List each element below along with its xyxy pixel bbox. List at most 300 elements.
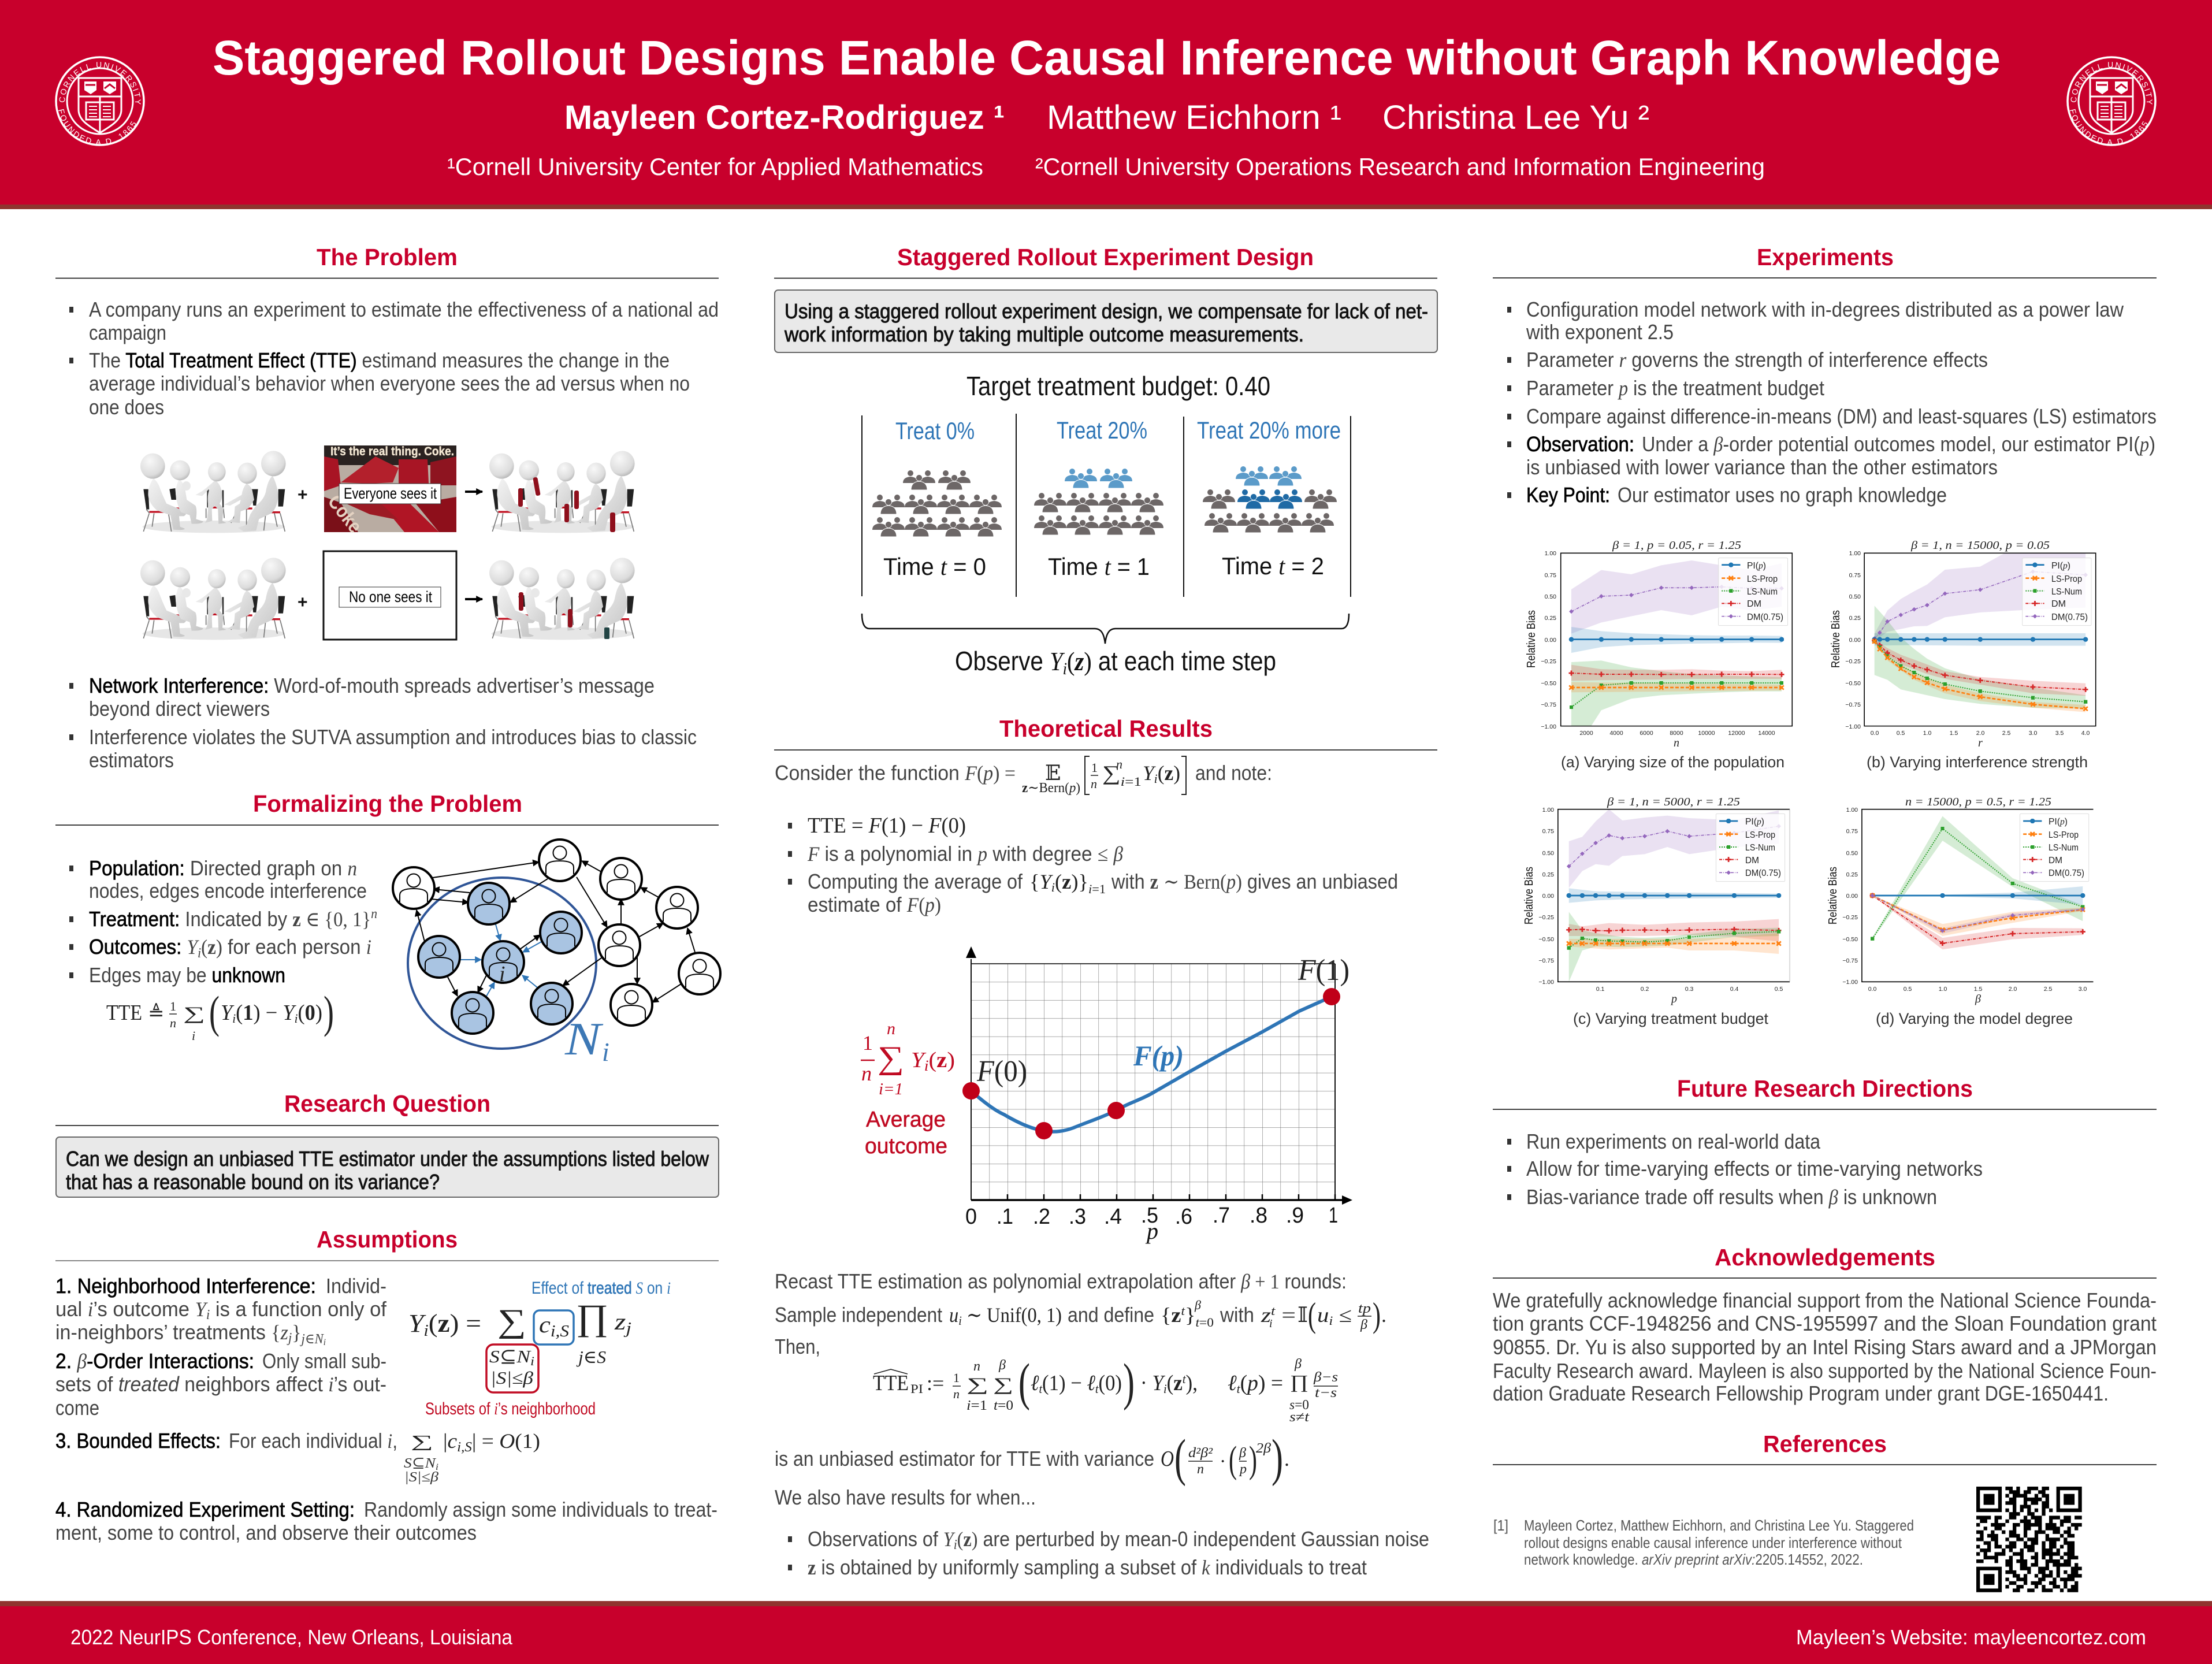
- bullets: experiment setup: Our estimator uses no graph knowledge: [1618, 483, 1947, 507]
- text: funding statement: tion grants CCF-1948256 and CNS-1955997 and the Sloan Foundation grant: [1493, 1312, 2157, 1335]
- formula: TTE definition: n: [170, 1016, 176, 1030]
- axis labels: −0.75: [1845, 701, 1861, 708]
- formula: PI estimator: t−s: [1315, 1386, 1337, 1401]
- stage: time 0: [872, 417, 1002, 581]
- text: variance bound: ·: [1220, 1451, 1226, 1472]
- text: variance bound: β: [1239, 1446, 1246, 1461]
- bullets: properties of F: [788, 814, 1398, 916]
- y-axis label: outcome: [865, 1134, 947, 1158]
- axis labels: −0.75: [1538, 957, 1554, 964]
- text: citation: [1493, 1517, 1914, 1568]
- formula: potential outcomes model: ∑: [497, 1303, 526, 1339]
- text: assumption 3: O(1): [499, 1429, 539, 1453]
- text: polynomial extrapolation: ≤: [1333, 1303, 1352, 1327]
- axis labels: [1842, 807, 1858, 986]
- formula: TTE definition: TTE: [106, 1001, 142, 1025]
- chart (b): varying interference strength: [1830, 539, 2096, 771]
- text: assumption 1: i: [324, 1338, 326, 1347]
- formula: TTE definition: ): [324, 987, 334, 1037]
- heading: Formalizing the Problem: Formalizing the Problem: [253, 790, 522, 817]
- axis labels: 0.75: [1545, 572, 1556, 579]
- formula: F(p) definition: i: [1121, 774, 1125, 789]
- chart (d): varying model degree: β: [1975, 993, 1981, 1005]
- panel: Formalizing the Problem: [55, 790, 720, 1067]
- bullets: extensions: [788, 1527, 1429, 1579]
- callout: coefficient box: [534, 1310, 574, 1344]
- formula: potential outcomes model: (: [429, 1309, 438, 1338]
- image: Coke ad: It’s the real thing. Coke.: [330, 445, 454, 458]
- bullets: properties of F: z)}: [1062, 870, 1088, 893]
- text: polynomial extrapolation: t: [1271, 1303, 1276, 1318]
- text: variance bound: p: [1239, 1462, 1247, 1477]
- axis labels: [1845, 550, 1861, 730]
- formula: PI estimator: t: [1039, 1381, 1043, 1396]
- x-axis labels: .2: [1033, 1205, 1050, 1229]
- formula: TTE definition: i: [192, 1028, 195, 1043]
- legend labels: LS-Num: [1745, 843, 1775, 853]
- text: citation: Mayleen Cortez, Matthew Eichhorn, and Christina Lee Yu. Staggered: [1524, 1517, 1914, 1534]
- text: assumption 1: j∈N: [300, 1332, 325, 1347]
- y-axis label: n: [861, 1062, 872, 1085]
- chart (a): varying population size: 2000: [1579, 730, 1593, 737]
- formula: PI estimator: 1: [953, 1370, 960, 1385]
- formula: TTE definition: 1) − Y: [243, 1001, 295, 1025]
- icon: Cornell seal right: FOUNDED A.D. 1865: [2070, 109, 2148, 144]
- text: polynomial extrapolation: (: [1308, 1296, 1316, 1334]
- chart (c): varying treatment budget: β = 1, n = 5000, r = 1.25: [1607, 796, 1740, 808]
- formula: F(p) definition: n: [1116, 757, 1122, 771]
- bullets: extensions: z) are perturbed by mean-0 independent Gaussian noise: [963, 1527, 1482, 1551]
- text: polynomial extrapolation: =0: [1199, 1315, 1214, 1329]
- bullets: formal definitions: Edges may be unknown: [89, 963, 285, 987]
- bullets: problem statement: The Total Treatment Effect (TTE) estimand measures the change in the: [89, 348, 670, 372]
- x-axis labels: .4: [1104, 1205, 1122, 1229]
- legend labels: PI(p): [2051, 561, 2070, 571]
- formula: PI estimator: t: [1095, 1381, 1099, 1396]
- panel: Experiments: [1493, 244, 2157, 1027]
- chart (b): varying interference strength: (b) Varying interference strength: [1867, 753, 2088, 771]
- text: variance bound: [775, 1429, 1289, 1509]
- formula: F(p) definition: Y: [1143, 762, 1157, 785]
- text: variance bound: ): [1272, 1429, 1283, 1487]
- x-axis labels: 1: [1329, 1204, 1338, 1228]
- formula: PI estimator: PI: [910, 1381, 923, 1396]
- formula: TTE definition: Y: [221, 1001, 235, 1025]
- formula: potential outcomes model: j∈S: [576, 1347, 606, 1367]
- text: assumption 1: ual i’s outcome Y: [55, 1297, 207, 1321]
- text: polynomial extrapolation: i: [958, 1313, 962, 1328]
- panel: Future Research Directions: [1493, 1075, 2157, 1209]
- bullets: properties of F: i: [1088, 882, 1092, 896]
- bullets: properties of F: =1: [1092, 882, 1106, 896]
- figure: everyone sees the ad: [140, 445, 635, 537]
- bullets: extensions: i: [954, 1537, 957, 1552]
- chart (a): varying population size: Relative Bias: [1525, 610, 1538, 668]
- heading: Theoretical Results: Theoretical Results: [999, 715, 1213, 742]
- formula: PI estimator: ∑: [993, 1374, 1013, 1394]
- bullets: formal definitions: Outcomes: Y: [89, 935, 199, 959]
- formula: F(p) definition: z): [1164, 762, 1180, 785]
- formula: PI estimator: · Y: [1140, 1371, 1165, 1395]
- text: assumption 1: in-neighbors’ treatments {z: [55, 1320, 289, 1344]
- text: assumption 4: Randomly assign some individuals to treat-: [364, 1498, 717, 1521]
- affiliations: ¹Cornell University Center for Applied Mathematics: [447, 153, 983, 180]
- bullets: properties of F: estimate of F(p): [808, 893, 941, 916]
- diagram: interference network: [393, 840, 720, 1067]
- chart (b): varying interference strength: β = 1, n = 15000, p = 0.05: [1910, 539, 2050, 552]
- text: assumption 2: [55, 1349, 386, 1420]
- bullets: formal definitions: z) for each person i: [207, 935, 373, 959]
- axis labels: 0.25: [1849, 615, 1861, 622]
- formula: PI estimator: s≠t: [1289, 1410, 1310, 1425]
- bullets: formal definitions: nodes, edges encode interference: [89, 879, 367, 902]
- text: polynomial extrapolation: ∼ Unif(0, 1): [962, 1303, 1062, 1327]
- chart (b): varying interference strength: r: [1978, 737, 1983, 749]
- chart (b): varying interference strength: 2.0: [1976, 730, 1984, 737]
- chart (c): varying treatment budget: Relative Bias: [1523, 867, 1536, 924]
- bullets: formal definitions: Population: Directed graph on n: [89, 856, 357, 880]
- chart (c): varying treatment budget: 0.4: [1730, 986, 1738, 993]
- callout: subset box: [486, 1344, 538, 1392]
- panel: Staggered Rollout Experiment Design: [774, 244, 1437, 678]
- y-axis label: n: [887, 1019, 895, 1038]
- text: polynomial extrapolation: {z: [1161, 1303, 1180, 1327]
- callout: research question: that has a reasonable bound on its variance?: [66, 1170, 440, 1194]
- caption: observe outcomes: (: [1067, 647, 1075, 676]
- formula: PI estimator: i: [1163, 1381, 1167, 1396]
- x-axis labels: .6: [1175, 1205, 1192, 1229]
- formula: TTE definition: (: [236, 1001, 243, 1025]
- text: assumption 4: [55, 1498, 717, 1544]
- legend labels: DM(0.75): [1747, 612, 1783, 622]
- chart (d): varying model degree: 0.5: [1904, 986, 1912, 993]
- axis labels: [1541, 550, 1556, 730]
- text: assumption 1: i: [206, 1308, 210, 1323]
- icon: coke bottles: [519, 592, 609, 639]
- legend labels: LS-Num: [1747, 587, 1778, 597]
- chart (a): varying population size: 14000: [1758, 730, 1775, 737]
- panel: Assumptions: [55, 1226, 719, 1544]
- chart (c): varying treatment budget: [1523, 796, 1790, 1027]
- formula: potential outcomes model: Effect of treated S on i: [531, 1279, 671, 1298]
- chart (d): varying model degree: 1.0: [1939, 986, 1947, 993]
- axis labels: −1.00: [1538, 979, 1554, 986]
- chart (c): varying treatment budget: 0.1: [1596, 986, 1604, 993]
- chart (a): varying population size: (a) Varying size of the population: [1561, 753, 1785, 771]
- axis labels: 0.75: [1849, 572, 1861, 579]
- chart (a): varying population size: n: [1674, 737, 1679, 749]
- text: citation: network knowledge. arXiv preprint arXiv:2205.14552, 2022.: [1524, 1551, 1863, 1568]
- stage: time 2: [1197, 417, 1341, 580]
- text: variance bound: n: [1197, 1462, 1204, 1477]
- axis labels: 0.25: [1846, 871, 1858, 878]
- callout: coefficient box: i,S: [551, 1323, 569, 1340]
- legend labels: [2051, 561, 2088, 622]
- axis labels: −0.50: [1842, 936, 1858, 943]
- formula: potential outcomes model: z: [615, 1309, 624, 1335]
- bullets: properties of F: Computing the average of: [808, 870, 1023, 893]
- text: variance bound: O: [1161, 1447, 1174, 1471]
- x-axis labels: .8: [1250, 1204, 1267, 1228]
- axis labels: 0.00: [1542, 893, 1554, 900]
- bullets: properties of F: with z ∼ Bern(p) gives an unbiased: [1111, 870, 1398, 893]
- text: funding statement: [1493, 1288, 2157, 1405]
- callout: research question: [56, 1137, 719, 1197]
- axis labels: −0.25: [1842, 914, 1858, 921]
- formula: PI estimator: z: [1173, 1371, 1183, 1395]
- formula: PI estimator: β−s: [1313, 1370, 1338, 1385]
- axis labels: 0.00: [1849, 637, 1861, 644]
- formula: F(p) definition: Consider the function F(p) =: [775, 761, 1016, 785]
- formula: PI estimator: (: [1240, 1371, 1247, 1395]
- y-axis label: 1: [863, 1031, 873, 1054]
- formula: potential outcomes model: i: [423, 1322, 429, 1340]
- bullets: formal definitions: Treatment: Indicated by z ∈ {0, 1}: [89, 907, 378, 931]
- legend labels: DM(0.75): [1745, 868, 1781, 878]
- heading: Experiments: Experiments: [1757, 244, 1894, 270]
- stage: time 1: Treat 20%: [1057, 417, 1147, 444]
- chart (d): varying model degree: Relative Bias: [1827, 867, 1839, 924]
- legend labels: LS-Prop: [1745, 830, 1775, 840]
- bullets: network interference: estimators: [89, 748, 174, 772]
- x-axis labels: [965, 1204, 1338, 1244]
- labels: F(p): [1133, 1039, 1184, 1072]
- bullets: future work: Run experiments on real-world data: [1526, 1130, 1821, 1153]
- legend labels: [1747, 561, 1783, 622]
- image: Coke ad: Coke: [324, 491, 366, 537]
- text: assumption 3: i: [436, 1462, 438, 1472]
- text: polynomial extrapolation: ): [1373, 1296, 1381, 1334]
- chart (d): varying model degree: 2.5: [2044, 986, 2052, 993]
- axis labels: −0.50: [1845, 680, 1861, 687]
- legend labels: LS-Num: [2051, 587, 2082, 597]
- legend labels: PI(p): [1745, 817, 1764, 827]
- formula: F(p) definition: ∑: [1102, 762, 1117, 785]
- text: assumption 3: i,S: [457, 1440, 472, 1455]
- text: assumption 3: ∑: [411, 1432, 433, 1451]
- bullets: extensions: (: [957, 1528, 963, 1551]
- axis labels: 1.00: [1849, 550, 1861, 557]
- formula: PI estimator: (: [1167, 1371, 1173, 1395]
- axis labels: −0.75: [1541, 701, 1556, 708]
- formula: PI estimator: n: [953, 1387, 960, 1401]
- figure: no one sees the ad: +: [298, 593, 308, 612]
- caption: observe outcomes: Observe Y: [955, 646, 1065, 676]
- x-axis labels: 0: [965, 1205, 977, 1229]
- bullets: formal definitions: n: [371, 907, 377, 922]
- heading: Assumptions: Assumptions: [317, 1226, 458, 1253]
- authors: Christina Lee Yu ²: [1382, 99, 1649, 136]
- bullets: formal definitions: i: [198, 946, 201, 961]
- bullets: network interference: beyond direct viewers: [89, 697, 270, 720]
- text: polynomial extrapolation: β: [1360, 1317, 1367, 1332]
- text: variance bound: is an unbiased estimator for TTE with variance: [775, 1447, 1154, 1470]
- formula: PI estimator: ),: [1186, 1371, 1198, 1395]
- affiliations: [447, 153, 1765, 180]
- icon: Cornell seal right: CORNELL UNIVERSITY: [2070, 62, 2152, 105]
- x-axis labels: .1: [997, 1205, 1013, 1229]
- bullets: properties of F: {Y: [1029, 870, 1051, 893]
- panel: Theoretical Results: [774, 715, 1437, 1579]
- text: assumption 1: [55, 1274, 387, 1347]
- formula: F(p) definition: z∼Bern(p): [1022, 781, 1080, 796]
- axis labels: [1538, 807, 1554, 986]
- labels: F(1): [1298, 954, 1349, 987]
- text: assumption 3: [55, 1429, 540, 1485]
- text: assumption 1: }: [292, 1321, 302, 1344]
- formula: potential outcomes model: Y: [408, 1309, 426, 1338]
- chart (b): varying interference strength: 0.0: [1871, 730, 1879, 737]
- heading: References: References: [1763, 1431, 1887, 1457]
- axis labels: −0.25: [1538, 914, 1554, 921]
- formula: TTE definition: [106, 987, 334, 1043]
- text: variance bound: We also have results for when...: [775, 1485, 1036, 1509]
- heading: Research Question: Research Question: [284, 1090, 490, 1117]
- formula: PI estimator: β: [1294, 1357, 1302, 1372]
- formula: PI estimator: ): [1123, 1354, 1135, 1411]
- text: assumption 3: 3. Bounded Effects:: [55, 1429, 221, 1453]
- chart (d): varying model degree: (d) Varying the model degree: [1876, 1010, 2073, 1027]
- bullets: experiment setup: Under a β-order potential outcomes model, our estimator PI(p): [1642, 432, 2155, 456]
- legend labels: LS-Prop: [2049, 830, 2079, 840]
- text: polynomial extrapolation: Then,: [775, 1335, 820, 1358]
- diagram: interference network: N: [564, 1014, 604, 1065]
- bullets: problem statement: campaign: [89, 321, 166, 344]
- axis labels: −0.50: [1541, 680, 1556, 687]
- formula: TTE definition: ≜: [148, 1002, 164, 1024]
- chart (d): varying model degree: 2.0: [2009, 986, 2017, 993]
- text: assumption 3: |S|≤β: [404, 1470, 438, 1485]
- chart (c): varying treatment budget: 0.3: [1685, 986, 1693, 993]
- arrow: [465, 598, 482, 600]
- x-axis labels: .9: [1286, 1204, 1304, 1228]
- legend labels: PI(p): [2049, 817, 2068, 827]
- axis labels: 1.00: [1846, 807, 1858, 814]
- chart (b): varying interference strength: 2.5: [2002, 730, 2010, 737]
- chart (b): varying interference strength: 3.5: [2055, 730, 2064, 737]
- chart (d): varying model degree: 1.5: [1974, 986, 1982, 993]
- axis labels: 0.25: [1545, 615, 1556, 622]
- footer: conference: 2022 NeurIPS Conference, New Orleans, Louisiana: [70, 1625, 513, 1649]
- text: assumption 1: 1. Neighborhood Interference:: [55, 1274, 316, 1298]
- formula: potential outcomes model: ∏: [576, 1297, 608, 1338]
- formula: PI estimator: ℓ: [1228, 1371, 1237, 1395]
- text: assumption 3: | =: [472, 1429, 499, 1453]
- panel: Acknowledgements: [1493, 1244, 2157, 1405]
- text: citation: rollout designs enable causal inference under interference without: [1524, 1534, 1902, 1551]
- callout: design summary: Using a staggered rollout experiment design, we compensate for lack of net-: [785, 299, 1428, 323]
- text: assumption 4: ment, some to control, and observe their outcomes: [55, 1521, 477, 1544]
- text: polynomial extrapolation: β: [1194, 1298, 1201, 1312]
- bullets: properties of F: i: [1051, 880, 1055, 894]
- text: polynomial extrapolation: t: [1195, 1315, 1200, 1329]
- text: assumption 1: j: [287, 1331, 292, 1346]
- chart (a): varying population size: 12000: [1728, 730, 1745, 737]
- panel: Research Question: [55, 1090, 719, 1197]
- text: polynomial extrapolation: Recast TTE estimation as polynomial extrapolation after β + 1 rounds:: [775, 1269, 1347, 1293]
- legend labels: DM: [1745, 856, 1759, 866]
- y-axis label: i=1: [879, 1080, 903, 1098]
- text: polynomial extrapolation: tp: [1358, 1301, 1371, 1316]
- bullets: experiment setup: Configuration model network with in-degrees distributed as a power law: [1526, 298, 2124, 321]
- formula: TTE definition: i: [232, 1011, 236, 1026]
- formula: TTE definition: ∑: [183, 1003, 205, 1023]
- chart (b): varying interference strength: Relative Bias: [1830, 610, 1842, 668]
- legend labels: [2049, 817, 2084, 878]
- chart (b): varying interference strength: 1.5: [1950, 730, 1958, 737]
- y-axis label: (: [929, 1048, 936, 1072]
- chart (d): varying model degree: 3.0: [2079, 986, 2087, 993]
- text: variance bound: d²β²: [1188, 1446, 1213, 1461]
- formula: potential outcomes model: z) =: [438, 1309, 479, 1338]
- x-axis labels: p: [1145, 1218, 1158, 1244]
- bullets: problem statement: A company runs an experiment to estimate the effectiveness of a national ad: [89, 298, 719, 321]
- bullets: experiment setup: Key Point:: [1526, 483, 1610, 507]
- formula: potential outcomes model: j: [624, 1320, 631, 1338]
- heading: Future Research Directions: Future Research Directions: [1677, 1075, 1973, 1102]
- formula: PI estimator: ∑: [966, 1374, 988, 1394]
- formula: PI estimator: t: [1183, 1372, 1186, 1386]
- formula: PI estimator: t=0: [994, 1398, 1013, 1413]
- chart: F(p) polynomial: [861, 946, 1352, 1244]
- formula: F(p) definition: 1: [1091, 760, 1098, 775]
- axis labels: −0.25: [1845, 658, 1861, 665]
- text: assumption 4: 4. Randomized Experiment Setting:: [55, 1498, 355, 1521]
- icon: Cornell seal left: [55, 56, 145, 146]
- bullets: problem statement: [69, 298, 719, 419]
- axis labels: 0.50: [1849, 593, 1861, 600]
- formula: PI estimator: TTE: [873, 1371, 909, 1395]
- stage: time 0: Treat 0%: [895, 417, 975, 444]
- callout: design summary: [775, 290, 1437, 352]
- heading: Acknowledgements: Acknowledgements: [1715, 1244, 1935, 1271]
- text: polynomial extrapolation: =: [1275, 1303, 1296, 1327]
- formula: PI estimator: p) =: [1247, 1371, 1284, 1395]
- chart (c): varying treatment budget: p: [1670, 993, 1677, 1005]
- bullets: network interference: [69, 674, 697, 772]
- icon: Cornell seal right: [2066, 56, 2157, 146]
- text: assumption 2: come: [55, 1396, 99, 1420]
- labels: [976, 954, 1349, 1088]
- diagram: interference network: i: [602, 1037, 609, 1067]
- chart (b): varying interference strength: 0.5: [1897, 730, 1905, 737]
- axis labels: 0.50: [1846, 850, 1858, 857]
- y-axis label: ∑: [878, 1040, 904, 1076]
- affiliations: ²Cornell University Operations Research and Information Engineering: [1035, 153, 1765, 180]
- x-axis labels: .5: [1141, 1204, 1158, 1228]
- chart (c): varying treatment budget: (c) Varying treatment budget: [1573, 1010, 1768, 1027]
- chart (a): varying population size: 8000: [1670, 730, 1683, 737]
- image: Coke ad: Everyone sees it: [344, 485, 437, 502]
- chart (a): varying population size: 4000: [1609, 730, 1623, 737]
- text: polynomial extrapolation: 𝕀: [1298, 1303, 1308, 1327]
- diagram: rollout stages: [862, 371, 1351, 678]
- y-axis label: Y: [911, 1048, 927, 1072]
- bullets: future work: [1507, 1130, 1983, 1209]
- axis labels: −1.00: [1845, 723, 1861, 730]
- text: polynomial extrapolation: z: [1261, 1303, 1271, 1327]
- y-axis label: i: [924, 1057, 929, 1074]
- formula: PI estimator: ∏: [1290, 1371, 1308, 1392]
- formula: F(p) definition: [775, 756, 1272, 796]
- legend labels: DM(0.75): [2051, 612, 2088, 622]
- legend labels: LS-Num: [2049, 843, 2079, 853]
- legend labels: LS-Prop: [2051, 574, 2082, 584]
- footer: website: Mayleen’s Website: mayleencortez.com: [1796, 1625, 2146, 1649]
- legend labels: DM(0.75): [2049, 868, 2084, 878]
- legend labels: LS-Prop: [1747, 574, 1778, 584]
- axis labels: 0.00: [1846, 893, 1858, 900]
